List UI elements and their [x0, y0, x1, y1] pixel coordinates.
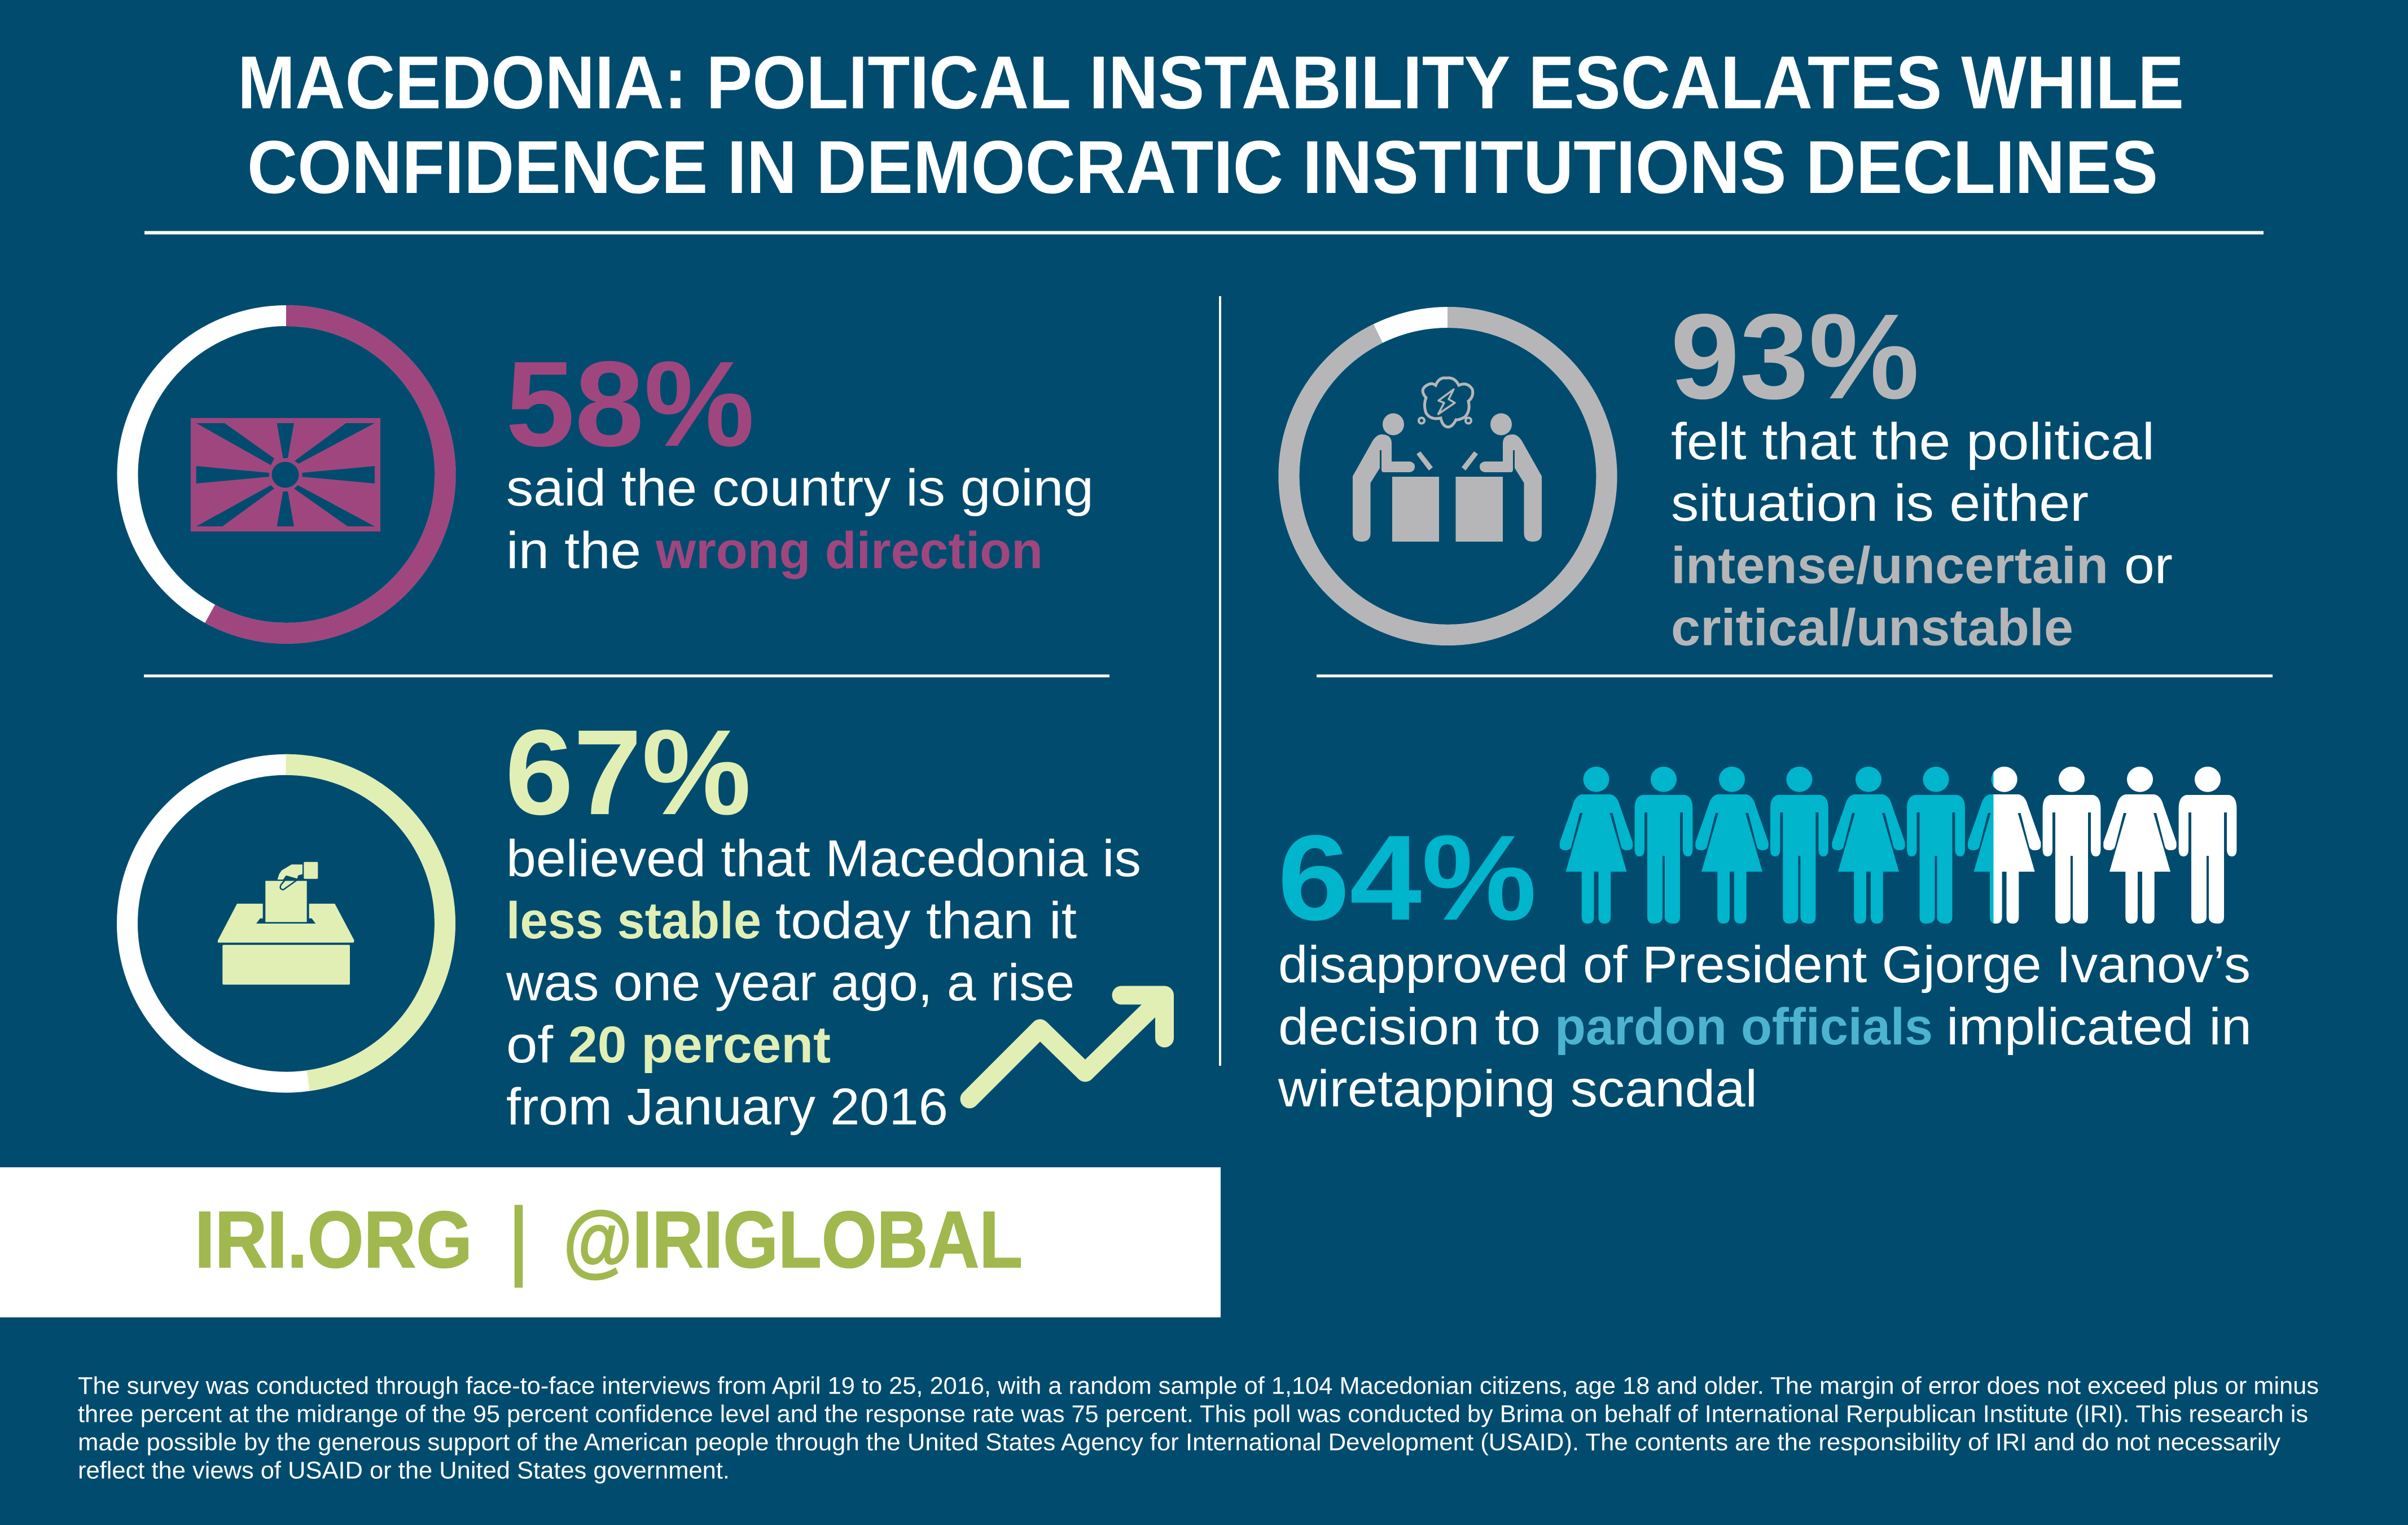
- text: wrong direction: wrong direction: [655, 522, 1043, 579]
- text: less stable: [506, 830, 1141, 1136]
- panel: 64 percent disapproved: [1278, 767, 2252, 1118]
- text: political situation: situation is either: [1671, 474, 2089, 532]
- text: pardon officials: pardon officials: [1555, 998, 1933, 1056]
- banner: website and handle: IRI.ORG: [195, 1195, 472, 1285]
- text: political situation: intense/uncertain: [1671, 537, 2108, 595]
- footnote: survey methodology: The survey was conducted through face-to-face interviews from April 19 to 25, 2016, with a random sample of 1,104 Macedonian citizens, age 18 and older. The margin of error does not exceed plus or minus: [78, 1373, 2319, 1400]
- title: CONFIDENCE IN DEMOCRATIC INSTITUTIONS DECLINES: [247, 126, 2158, 209]
- statistic: 93%: 93%: [1670, 288, 1919, 424]
- icon: rising arrow: [970, 995, 1165, 1099]
- footnote: survey methodology: [78, 1373, 2319, 1484]
- text: less stable: was one year ago, a rise: [506, 954, 1074, 1012]
- ring chart: 67 percent: [128, 764, 445, 1082]
- pictogram: ten people, 64 percent filled: [1560, 767, 2236, 924]
- text: political situation: [1671, 413, 2173, 657]
- panel: 93 percent political situation: [1289, 288, 2173, 657]
- text: political situation: critical/unstable: [1671, 599, 2073, 657]
- footnote: survey methodology: three percent at the midrange of the 95 percent confidence level and the response rate was 75 percent. This poll was conducted by Brima on behalf of International Rerpublican Institute (IRI). This research is: [78, 1401, 2308, 1428]
- icon: Macedonian flag: [191, 418, 380, 531]
- panel: 58 percent wrong direction: [128, 316, 1094, 633]
- panel: 67 percent less stable: [128, 704, 1165, 1136]
- title: [238, 41, 2184, 209]
- text: wrong direction: in the: [506, 522, 641, 579]
- banner: website and handle: @IRIGLOBAL: [563, 1195, 1023, 1285]
- statistic: 67%: 67%: [505, 704, 751, 840]
- text: political situation: or: [2124, 537, 2173, 595]
- text: less stable: 20 percent: [568, 1016, 831, 1074]
- text: pardon officials: decision to: [1278, 998, 1541, 1056]
- text: pardon officials: disapproved of President Gjorge Ivanov’s: [1278, 936, 2251, 994]
- text: pardon officials: [1278, 936, 2252, 1118]
- footnote: survey methodology: reflect the views of USAID or the United States government.: [78, 1457, 730, 1484]
- title: MACEDONIA: POLITICAL INSTABILITY ESCALATES WHILE: [238, 41, 2184, 125]
- text: wrong direction: [506, 459, 1094, 579]
- text: less stable: less stable: [506, 892, 761, 950]
- banner: website and handle: |: [510, 1189, 528, 1288]
- footnote: survey methodology: made possible by the generous support of the American people through the United States Agency for International Development (USAID). The contents are the responsibility of IRI and do not necessarily: [78, 1429, 2281, 1456]
- text: wrong direction: said the country is going: [506, 459, 1094, 517]
- text: less stable: today than it: [775, 892, 1077, 950]
- ring chart: 93 percent: [1289, 317, 1607, 635]
- text: less stable: from January 2016: [506, 1078, 948, 1136]
- ring chart: 58 percent: [128, 316, 445, 633]
- text: pardon officials: wiretapping scandal: [1278, 1060, 1757, 1118]
- text: less stable: believed that Macedonia is: [506, 830, 1141, 887]
- banner: website and handle: [0, 1167, 1221, 1317]
- text: pardon officials: implicated in: [1946, 998, 2252, 1056]
- icon: ballot box: [218, 862, 354, 985]
- text: political situation: felt that the political: [1671, 413, 2155, 471]
- statistic: 64%: 64%: [1278, 810, 1537, 946]
- icon: two people arguing at podiums: [1353, 378, 1542, 542]
- statistic: 58%: 58%: [506, 336, 755, 472]
- text: less stable: of: [506, 1016, 553, 1074]
